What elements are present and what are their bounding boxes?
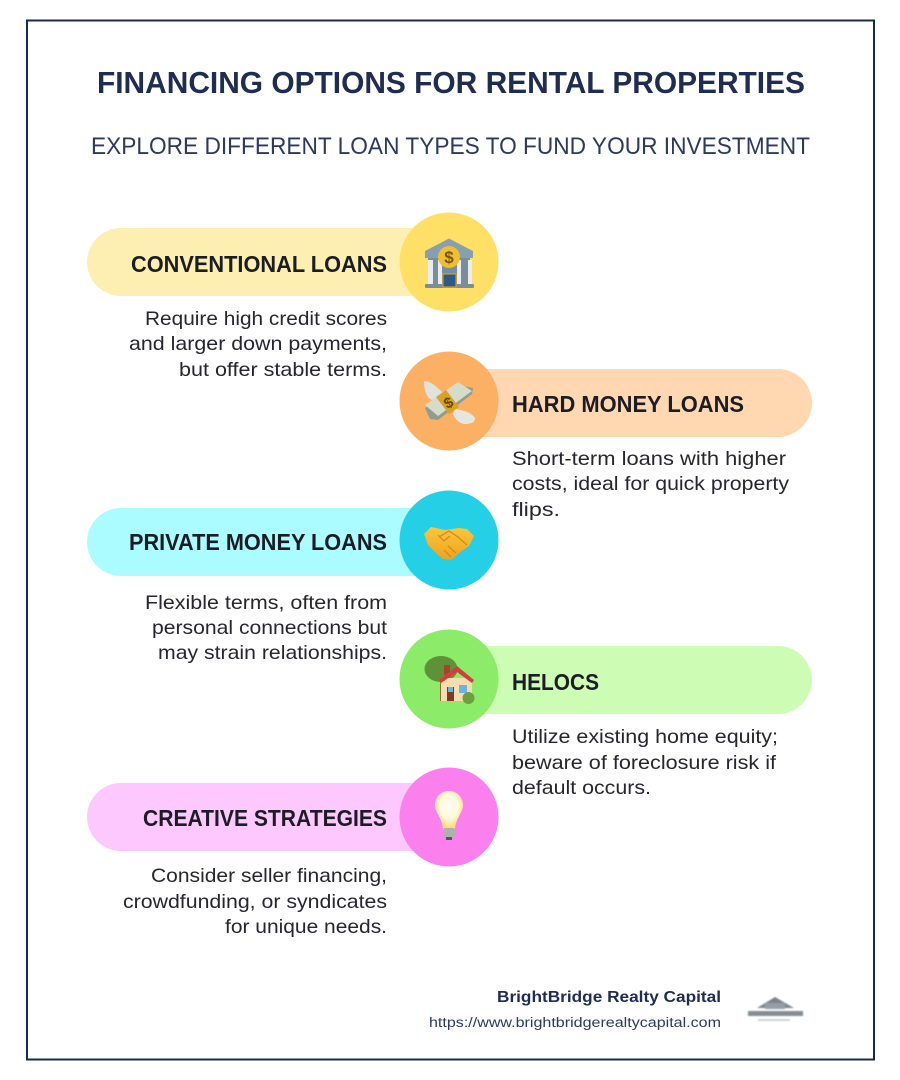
creative description xyxy=(123,865,387,938)
conventional pill xyxy=(87,228,449,296)
helocs heading: HELOCS xyxy=(512,669,599,695)
private money description xyxy=(145,592,388,664)
footer url: https://www.brightbridgerealtycapital.com xyxy=(429,1015,721,1030)
panel: conventional loans xyxy=(87,212,499,381)
private money description: personal connections but xyxy=(152,617,388,639)
conventional description xyxy=(129,308,387,381)
title: FINANCING OPTIONS FOR RENTAL PROPERTIES xyxy=(97,65,805,100)
panel: creative strategies xyxy=(87,768,498,938)
creative pill xyxy=(87,783,449,851)
helocs description xyxy=(512,726,778,799)
icon: footer logo xyxy=(748,997,803,1021)
helocs description: Utilize existing home equity; xyxy=(512,726,778,748)
conventional circle xyxy=(400,212,498,312)
icon: bank xyxy=(425,238,474,288)
hard money circle xyxy=(400,352,498,450)
conventional heading: CONVENTIONAL LOANS xyxy=(131,251,387,277)
footer brand name: BrightBridge Realty Capital xyxy=(497,989,721,1006)
creative description: for unique needs. xyxy=(225,916,387,938)
panel: helocs xyxy=(400,630,812,799)
creative circle xyxy=(400,768,498,866)
creative heading: CREATIVE STRATEGIES xyxy=(143,805,387,831)
private money description: may strain relationships. xyxy=(158,642,387,664)
hard money heading: HARD MONEY LOANS xyxy=(512,391,744,417)
panel: hard money loans xyxy=(400,352,812,521)
conventional description: but offer stable terms. xyxy=(179,359,387,381)
icon: house with tree xyxy=(424,656,474,704)
icon: money with wings xyxy=(424,381,475,424)
icon: handshake xyxy=(424,527,474,560)
helocs description: default occurs. xyxy=(512,777,651,799)
conventional description: and larger down payments, xyxy=(129,333,387,355)
hard money pill xyxy=(449,369,812,437)
helocs pill xyxy=(449,646,812,714)
icon: bank: $ xyxy=(444,248,454,267)
helocs circle xyxy=(400,630,498,728)
private money pill xyxy=(87,508,449,576)
panel: private money loans xyxy=(87,490,498,664)
subtitle: EXPLORE DIFFERENT LOAN TYPES TO FUND YOUR INVESTMENT xyxy=(91,133,810,160)
private money heading: PRIVATE MONEY LOANS xyxy=(129,529,387,555)
creative description: Consider seller financing, xyxy=(151,865,387,887)
private money description: Flexible terms, often from xyxy=(145,592,387,614)
icon: light bulb xyxy=(435,791,463,840)
icon: money with wings: $ xyxy=(441,394,457,413)
conventional description: Require high credit scores xyxy=(145,308,387,330)
hard money description: flips. xyxy=(512,499,560,521)
hard money description: costs, ideal for quick property xyxy=(512,473,789,495)
creative description: crowdfunding, or syndicates xyxy=(123,891,387,913)
private money circle xyxy=(400,490,498,590)
helocs description: beware of foreclosure risk if xyxy=(512,752,777,774)
hard money description: Short-term loans with higher xyxy=(512,448,787,470)
hard money description xyxy=(512,448,789,521)
